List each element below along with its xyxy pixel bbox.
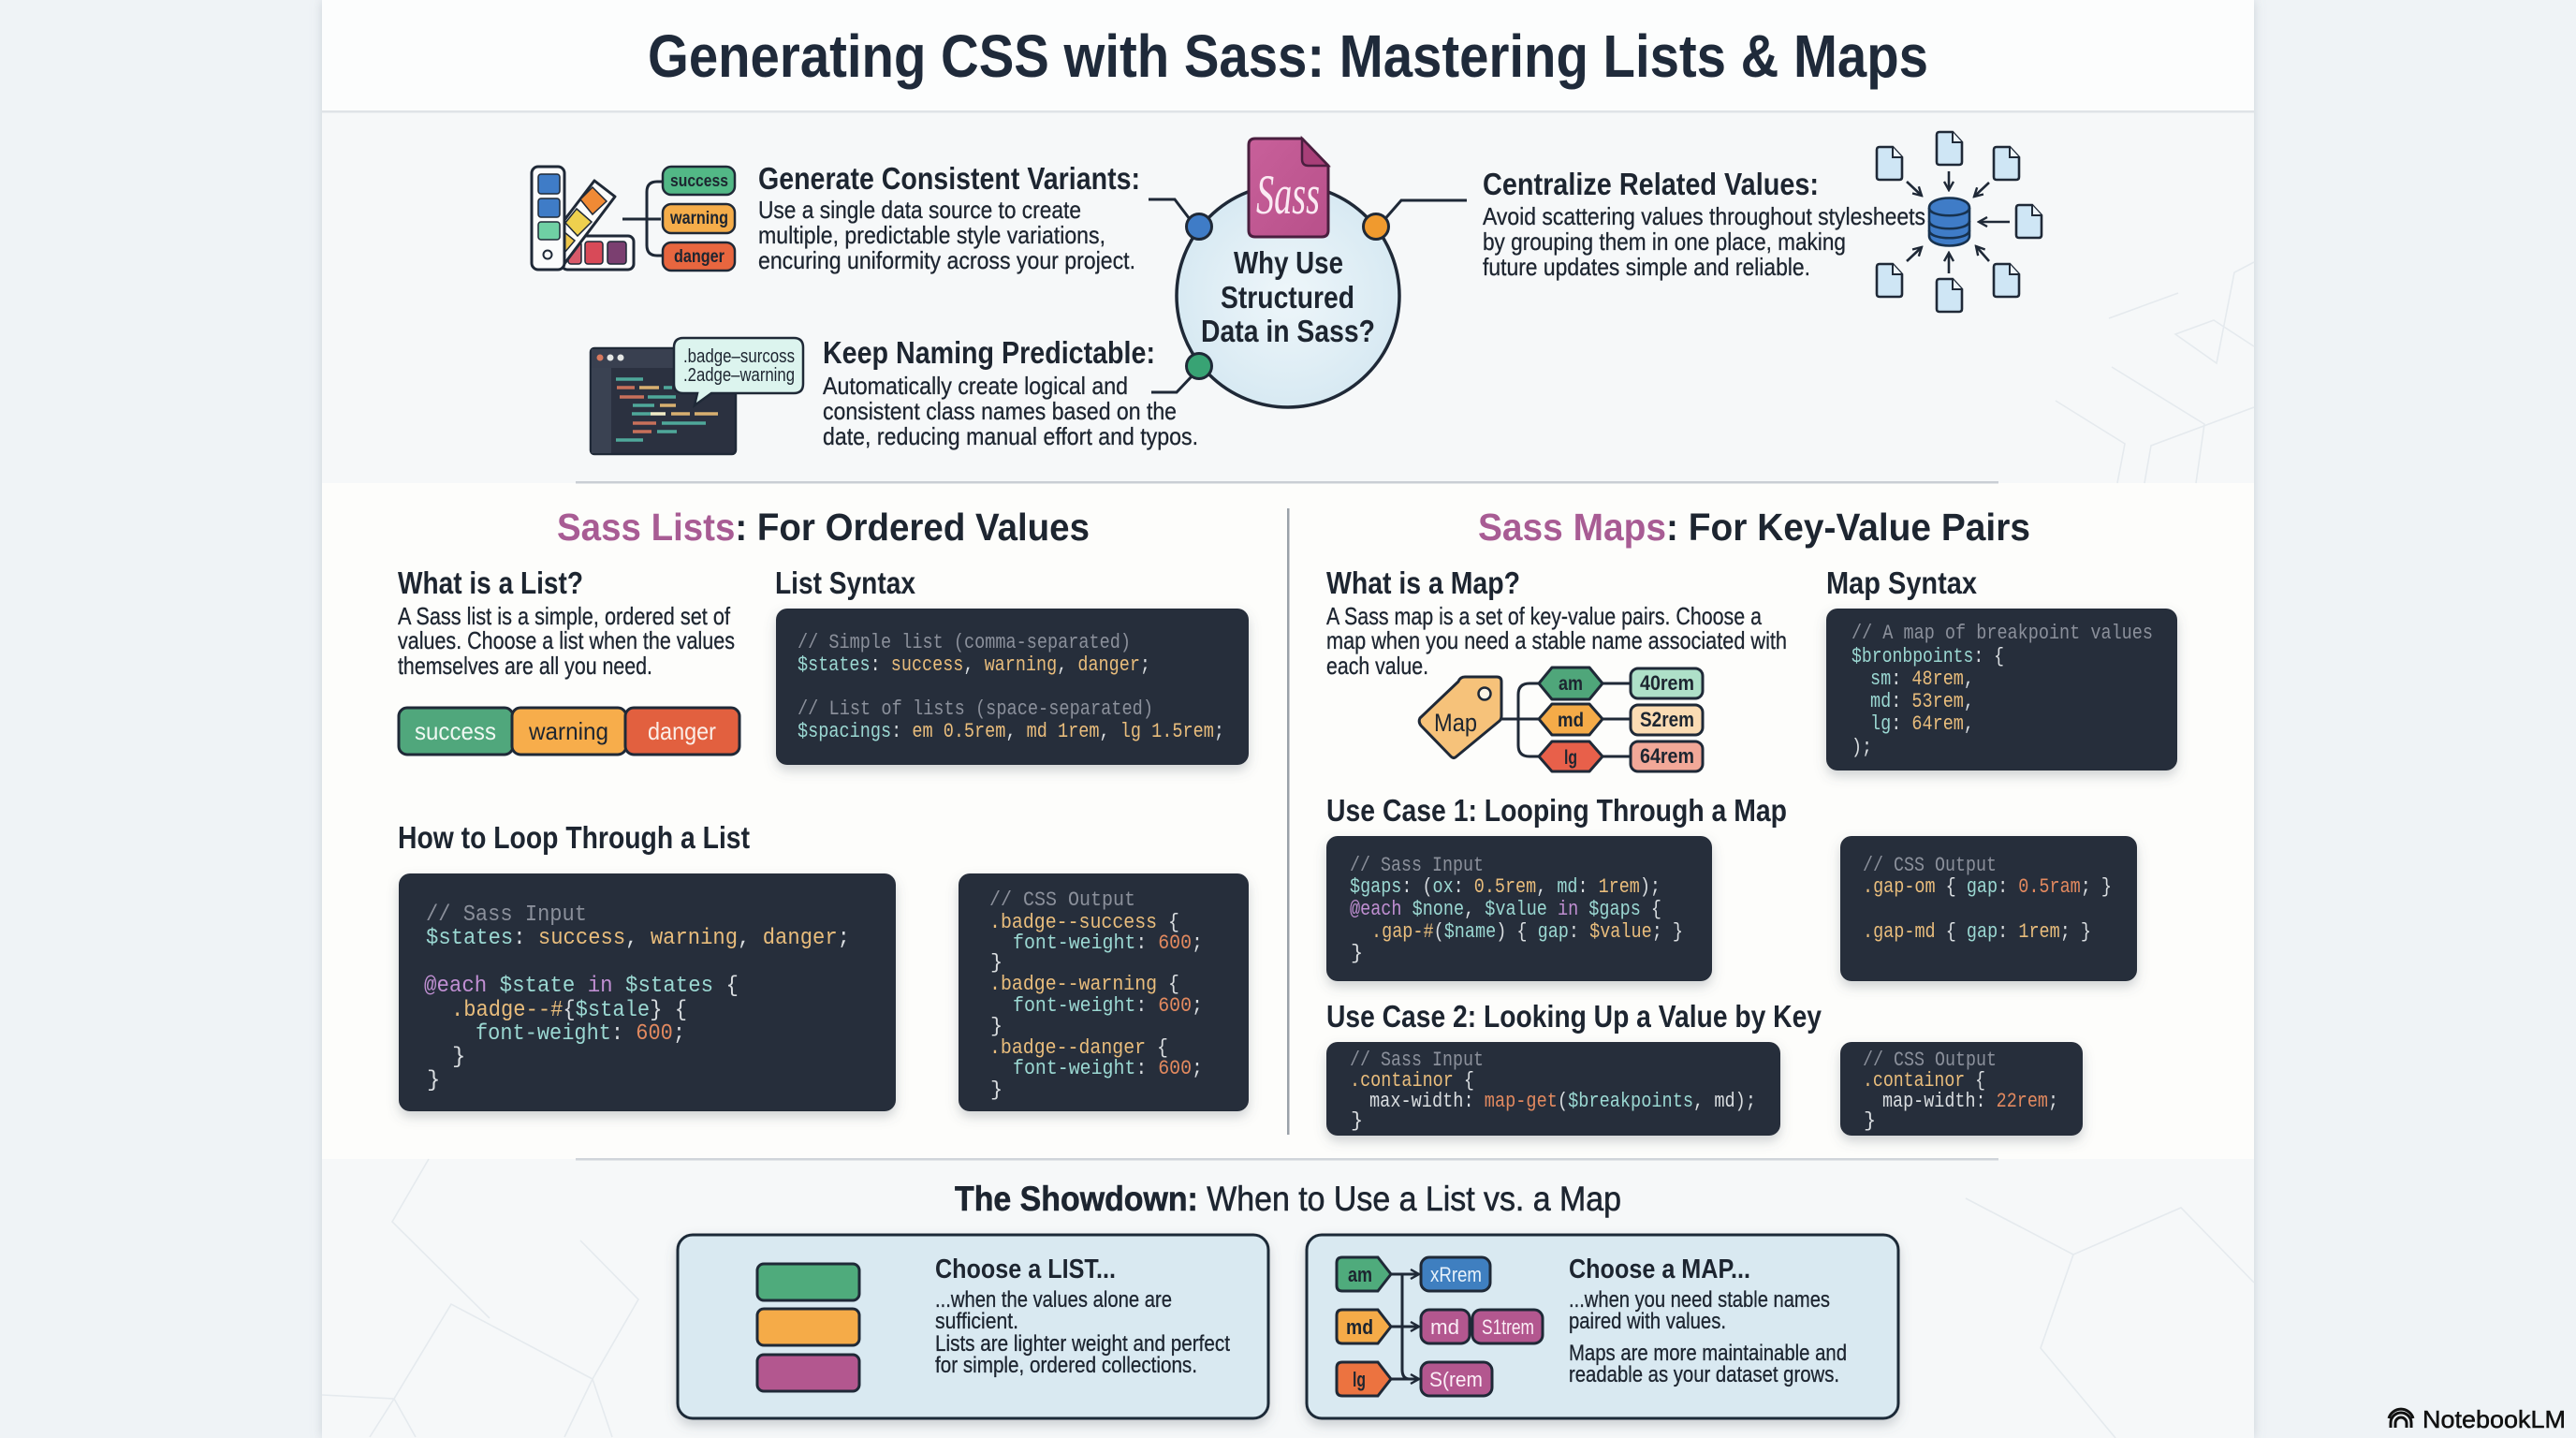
heading: what is a map: What is a Map? xyxy=(1326,565,1520,600)
tag: map xyxy=(1419,677,1501,758)
code: sass input: } xyxy=(452,1045,465,1070)
showdown heading: The Showdown: When to Use a List vs. a Map xyxy=(955,1180,1621,1218)
heading: use case 1: Use Case 1: Looping Through a Map xyxy=(1326,793,1787,828)
code: css output: } xyxy=(990,1015,1003,1038)
list pills: success xyxy=(415,717,496,745)
list card text: for simple, ordered collections. xyxy=(935,1353,1197,1378)
central question: Structured xyxy=(1221,280,1354,315)
code: use case 2 output: .containor { xyxy=(1863,1069,1985,1093)
code: use case 2 input xyxy=(1326,1042,1780,1136)
heading: list syntax: List Syntax xyxy=(775,565,916,600)
list pills: warning xyxy=(528,717,608,745)
map diagram xyxy=(1419,668,1703,771)
code: list syntax: $states: success, warning, danger; xyxy=(798,653,1150,677)
code: use case 1 output: .gap-md { gap: 1rem; } xyxy=(1863,920,2091,944)
code: sass input: } xyxy=(427,1068,440,1093)
map card text: Choose a MAP... xyxy=(1569,1255,1750,1284)
code: map syntax: lg: 64rem, xyxy=(1870,712,1974,736)
title: Generating CSS with Sass: Mastering Lists & Maps xyxy=(648,22,1928,90)
map description: each value. xyxy=(1326,652,1428,680)
code: css output: .badge--success { xyxy=(989,911,1179,934)
pair: md 52rem: S2rem xyxy=(1640,708,1694,731)
section heading: maps: Sass Maps: For Key-Value Pairs xyxy=(1478,506,2030,549)
speech bubble: .badge–surcoss xyxy=(683,346,795,367)
pill: danger: danger xyxy=(674,247,725,267)
list card text: ...when the values alone are xyxy=(935,1287,1172,1313)
list pills: danger xyxy=(648,717,716,745)
node: orange xyxy=(1363,213,1389,240)
list card text: Choose a LIST... xyxy=(935,1255,1116,1284)
code: use case 1 input: $gaps: (ox: 0.5rem, md: 1rem); xyxy=(1350,875,1661,899)
code: use case 1 output xyxy=(1840,836,2137,981)
map card text xyxy=(1569,1255,1847,1387)
list card text xyxy=(935,1255,1230,1378)
benefit: centralize related values: Centralize Related Values: xyxy=(1483,167,1819,201)
speech bubble xyxy=(674,338,803,405)
code: sass input: @each $state in $states { xyxy=(424,974,739,999)
node: green xyxy=(1187,354,1211,378)
card: choose a list xyxy=(678,1235,1268,1418)
pair: lg 64rem xyxy=(1539,741,1703,771)
pair: md 52rem xyxy=(1539,704,1703,735)
map description: map when you need a stable name associated with xyxy=(1326,626,1787,654)
code: map syntax xyxy=(1826,609,2177,770)
benefit: generate consistent variants: multiple, predictable style variations, xyxy=(758,221,1105,249)
icon: key value flow: S(rem xyxy=(1429,1368,1483,1391)
panel: sass lists xyxy=(398,506,1249,1111)
benefit: keep naming predictable: date, reducing manual effort and typos. xyxy=(823,422,1198,450)
heading: use case 2: Use Case 2: Looking Up a Value by Key xyxy=(1326,999,1822,1034)
list card text: sufficient. xyxy=(935,1309,1018,1334)
code: use case 2 input: .containor { xyxy=(1350,1069,1474,1093)
icon: key value flow xyxy=(1337,1257,1543,1396)
icon: stacked list bars xyxy=(757,1264,859,1391)
icon: key value flow: md xyxy=(1430,1315,1459,1339)
code: sass input: .badge--#{$stale} { xyxy=(451,998,687,1023)
map card text: readable as your dataset grows. xyxy=(1569,1362,1839,1387)
code: css output: } xyxy=(990,1078,1003,1102)
code: css output: .badge--danger { xyxy=(989,1036,1168,1060)
list description: A Sass list is a simple, ordered set of xyxy=(398,602,731,630)
map description: A Sass map is a set of key-value pairs. Choose a xyxy=(1326,602,1762,630)
benefit: generate consistent variants xyxy=(758,161,1140,274)
pair: am 40rem: am xyxy=(1559,673,1583,695)
pair: am 40rem xyxy=(1539,668,1703,699)
code: list syntax: $spacings: em 0.5rem, md 1rem, lg 1.5rem; xyxy=(798,720,1224,743)
icon: sass file xyxy=(1249,139,1328,237)
code: use case 1 output: // CSS Output xyxy=(1863,854,1997,877)
benefit: keep naming predictable xyxy=(823,335,1198,450)
code: map syntax: md: 53rem, xyxy=(1870,690,1974,713)
benefit: generate consistent variants: Use a single data source to create xyxy=(758,196,1081,224)
pair: lg 64rem: lg xyxy=(1564,747,1577,769)
central question: Data in Sass? xyxy=(1201,314,1375,348)
code: css output: font-weight: 600; xyxy=(1013,932,1203,955)
list description: themselves are all you need. xyxy=(398,652,652,680)
code: use case 1 input: } xyxy=(1351,942,1363,965)
code: use case 2 input: } xyxy=(1351,1109,1363,1133)
code: use case 2 output: } xyxy=(1864,1109,1876,1133)
list description: values. Choose a list when the values xyxy=(398,626,735,654)
icon: colour palette with variants xyxy=(532,167,735,271)
code: use case 2 output xyxy=(1840,1042,2083,1136)
connector lines to benefit nodes xyxy=(1149,199,1467,392)
code: list syntax: // Simple list (comma-separated) xyxy=(798,631,1131,654)
map description xyxy=(1326,602,1787,680)
code: use case 1 input: @each $none, $value in $gaps { xyxy=(1350,898,1661,921)
pill: success xyxy=(663,167,735,195)
benefit: keep naming predictable: Keep Naming Predictable: xyxy=(823,335,1155,370)
code: css output: font-weight: 600; xyxy=(1013,994,1203,1018)
page card background xyxy=(322,0,2254,1438)
panel: the showdown xyxy=(678,1180,1898,1418)
icon: key value flow: lg xyxy=(1353,1368,1366,1391)
heading: what is a list: What is a List? xyxy=(398,565,583,600)
pill: warning: warning xyxy=(669,209,728,228)
icon: code window with speech bubble xyxy=(591,338,803,454)
code: css output: } xyxy=(990,951,1003,975)
section heading: lists: Sass Lists: For Ordered Values xyxy=(557,506,1090,549)
code: use case 2 input: // Sass Input xyxy=(1350,1049,1484,1072)
code: sass input xyxy=(399,873,896,1111)
list card text: Lists are lighter weight and perfect xyxy=(935,1331,1230,1357)
icon: sass file: Sass xyxy=(1256,164,1320,226)
code: css output: .badge--warning { xyxy=(989,973,1179,996)
central question: Why Use xyxy=(1234,245,1343,280)
code: use case 1 input: .gap-#($name) { gap: $value; } xyxy=(1371,920,1683,944)
benefit: generate consistent variants: encuring uniformity across your project. xyxy=(758,246,1135,274)
code: map syntax: $bronbpoints: { xyxy=(1852,645,2004,668)
code: list syntax: // List of lists (space-separated) xyxy=(798,697,1153,721)
code: use case 1 input: // Sass Input xyxy=(1350,854,1484,877)
code: sass input: $states: success, warning, danger; xyxy=(426,926,850,951)
speech bubble: .2adge–warning xyxy=(683,365,795,386)
code: use case 2 input: max-width: map-get($breakpoints, md); xyxy=(1369,1090,1756,1113)
icon: key value flow: am xyxy=(1348,1263,1372,1286)
icon: database with documents xyxy=(1877,132,2042,312)
code: use case 2 output: // CSS Output xyxy=(1863,1049,1997,1072)
panel: why use structured data xyxy=(1149,139,1467,407)
heading: loop through a list: How to Loop Through a List xyxy=(398,820,750,855)
map card text: ...when you need stable names xyxy=(1569,1287,1830,1313)
pill: danger xyxy=(663,242,735,271)
pill: warning xyxy=(663,204,735,233)
panel: sass maps xyxy=(1326,506,2177,1136)
code: map syntax: // A map of breakpoint values xyxy=(1852,622,2153,645)
tag: map: Map xyxy=(1434,709,1477,737)
code: use case 1 output: .gap-om { gap: 0.5ram; } xyxy=(1863,875,2112,899)
pair: lg 64rem: 64rem xyxy=(1640,744,1694,768)
code: sass input: // Sass Input xyxy=(426,902,587,928)
code: use case 2 output: map-width: 22rem; xyxy=(1882,1090,2058,1113)
card: choose a map xyxy=(1307,1235,1898,1418)
code: list syntax xyxy=(776,609,1249,765)
map card text: paired with values. xyxy=(1569,1309,1726,1334)
icon: key value flow: xRrem xyxy=(1430,1263,1482,1286)
node: blue xyxy=(1187,213,1211,240)
icon: key value flow: md xyxy=(1346,1315,1373,1339)
benefit: keep naming predictable: consistent class names based on the xyxy=(823,397,1177,425)
pair: am 40rem: 40rem xyxy=(1640,671,1694,695)
central question xyxy=(1201,245,1375,348)
code: sass input: font-weight: 600; xyxy=(476,1021,685,1047)
benefit: centralize related values: by grouping them in one place, making xyxy=(1483,227,1846,256)
code: map syntax: ); xyxy=(1852,736,1872,759)
map card text: Maps are more maintainable and xyxy=(1569,1341,1847,1366)
watermark: NotebookLM: NotebookLM xyxy=(2422,1405,2566,1433)
benefit: keep naming predictable: Automatically create logical and xyxy=(823,372,1128,400)
benefit: centralize related values xyxy=(1483,167,1925,281)
list pills xyxy=(399,708,739,755)
code: use case 1 input xyxy=(1326,836,1712,981)
list description xyxy=(398,602,735,680)
code: map syntax: sm: 48rem, xyxy=(1870,668,1974,691)
pair: md 52rem: md xyxy=(1558,710,1584,731)
code: css output xyxy=(959,873,1249,1111)
code: css output: font-weight: 600; xyxy=(1013,1057,1203,1080)
pill: success: success xyxy=(670,171,728,190)
benefit: centralize related values: future updates simple and reliable. xyxy=(1483,253,1810,281)
code: css output: // CSS Output xyxy=(989,888,1135,912)
benefit: centralize related values: Avoid scattering values throughout stylesheets xyxy=(1483,202,1925,230)
benefit: generate consistent variants: Generate Consistent Variants: xyxy=(758,161,1140,196)
central circle xyxy=(1177,184,1399,407)
heading: map syntax: Map Syntax xyxy=(1826,565,1978,600)
icon: key value flow: S1trem xyxy=(1482,1315,1534,1339)
